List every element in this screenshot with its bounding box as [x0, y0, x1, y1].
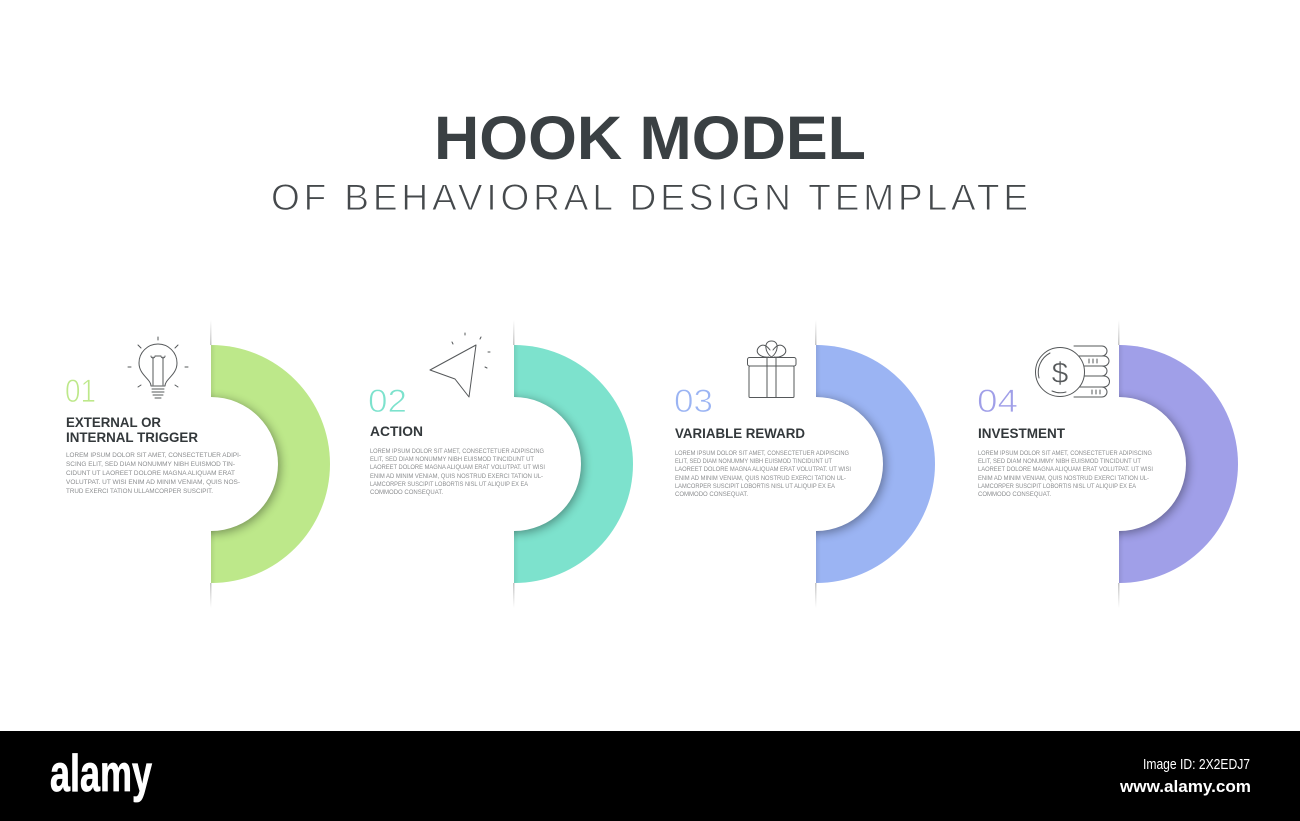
icon: dollar coin and stacked coins: [1036, 346, 1110, 397]
panel: step 4 investment: [977, 320, 1238, 608]
icon: light bulb: [128, 337, 188, 398]
body text: ENIM AD MINIM VENIAM, QUIS NOSTRUD EXERCI TATION UL-: [978, 475, 1149, 482]
body text: CIDUNT UT LAOREET DOLORE MAGNA ALIQUAM ERAT: [66, 470, 235, 477]
body text: VOLUTPAT. UT WISI ENIM AD MINIM VENIAM, QUIS NOS-: [66, 479, 240, 486]
body text: ELIT, SED DIAM NONUMMY NIBH EUISMOD TINCIDUNT UT: [978, 458, 1141, 465]
body text: LAMCORPER SUSCIPIT LOBORTIS NISL UT ALIQUIP EX EA: [675, 483, 835, 490]
watermark logo: alamy: [50, 745, 152, 803]
body text: [675, 450, 851, 498]
body text: LAOREET DOLORE MAGNA ALIQUAM ERAT VOLUTPAT. UT WISI: [978, 466, 1153, 473]
body text: SCING ELIT, SED DIAM NONUMMY NIBH EUISMOD TIN-: [66, 461, 235, 468]
body text: LOREM IPSUM DOLOR SIT AMET, CONSECTETUER ADIPISCING: [370, 448, 544, 455]
heading: INTERNAL TRIGGER: [66, 430, 198, 445]
body text: ENIM AD MINIM VENIAM, QUIS NOSTRUD EXERCI TATION UL-: [370, 473, 543, 480]
number 02: 02: [368, 383, 407, 419]
body text: COMMODO CONSEQUAT.: [978, 491, 1051, 498]
body text: LAMCORPER SUSCIPIT LOBORTIS NISL UT ALIQUIP EX EA: [978, 483, 1136, 490]
image id: Image ID: 2X2EDJ7: [1143, 756, 1250, 773]
heading: EXTERNAL OR: [66, 415, 161, 430]
body text: LAOREET DOLORE MAGNA ALIQUAM ERAT VOLUTPAT. UT WISI: [370, 464, 545, 471]
number 01: 01: [65, 373, 96, 409]
body text: LAOREET DOLORE MAGNA ALIQUAM ERAT VOLUTPAT. UT WISI: [675, 466, 851, 473]
body text: COMMODO CONSEQUAT.: [675, 491, 748, 498]
heading: ACTION: [370, 424, 423, 439]
number 03: 03: [674, 383, 713, 419]
half ring: purple: [1118, 324, 1238, 604]
heading: VARIABLE REWARD: [675, 426, 805, 441]
icon: gift box: [748, 341, 796, 398]
icon: cursor arrow: [430, 333, 490, 397]
half ring: blue: [815, 324, 935, 604]
body text: LOREM IPSUM DOLOR SIT AMET, CONSECTETUER ADIPISCING: [675, 450, 849, 457]
icon: dollar sign: $: [1052, 357, 1069, 390]
footer bar: [0, 731, 1300, 821]
panel: step 2 action: [368, 320, 633, 608]
half ring: teal: [513, 324, 633, 604]
subtitle: OF BEHAVIORAL DESIGN TEMPLATE: [271, 177, 1028, 218]
body text: LOREM IPSUM DOLOR SIT AMET, CONSECTETUER ADIPISCING: [978, 450, 1152, 457]
title: HOOK MODEL: [434, 104, 866, 172]
body text: [370, 448, 545, 496]
body text: [978, 450, 1153, 498]
website: www.alamy.com: [1119, 777, 1251, 796]
panel: step 3 variable reward: [674, 320, 935, 608]
body text: ELIT, SED DIAM NONUMMY NIBH EUISMOD TINCIDUNT UT: [370, 456, 534, 463]
body text: ENIM AD MINIM VENIAM, QUIS NOSTRUD EXERCI TATION UL-: [675, 475, 846, 482]
body text: ELIT, SED DIAM NONUMMY NIBH EUISMOD TINCIDUNT UT: [675, 458, 832, 465]
number 04: 04: [977, 383, 1018, 419]
panel: step 1 external or internal trigger: [65, 320, 330, 608]
body text: COMMODO CONSEQUAT.: [370, 489, 443, 496]
body text: [66, 452, 241, 495]
body text: LAMCORPER SUSCIPIT LOBORTIS NISL UT ALIQUIP EX EA: [370, 481, 528, 488]
half ring: green: [210, 324, 330, 604]
heading: INVESTMENT: [978, 426, 1066, 441]
body text: TRUD EXERCI TATION ULLAMCORPER SUSCIPIT.: [66, 488, 213, 495]
body text: LOREM IPSUM DOLOR SIT AMET, CONSECTETUER ADIPI-: [66, 452, 241, 459]
heading: [66, 415, 198, 445]
